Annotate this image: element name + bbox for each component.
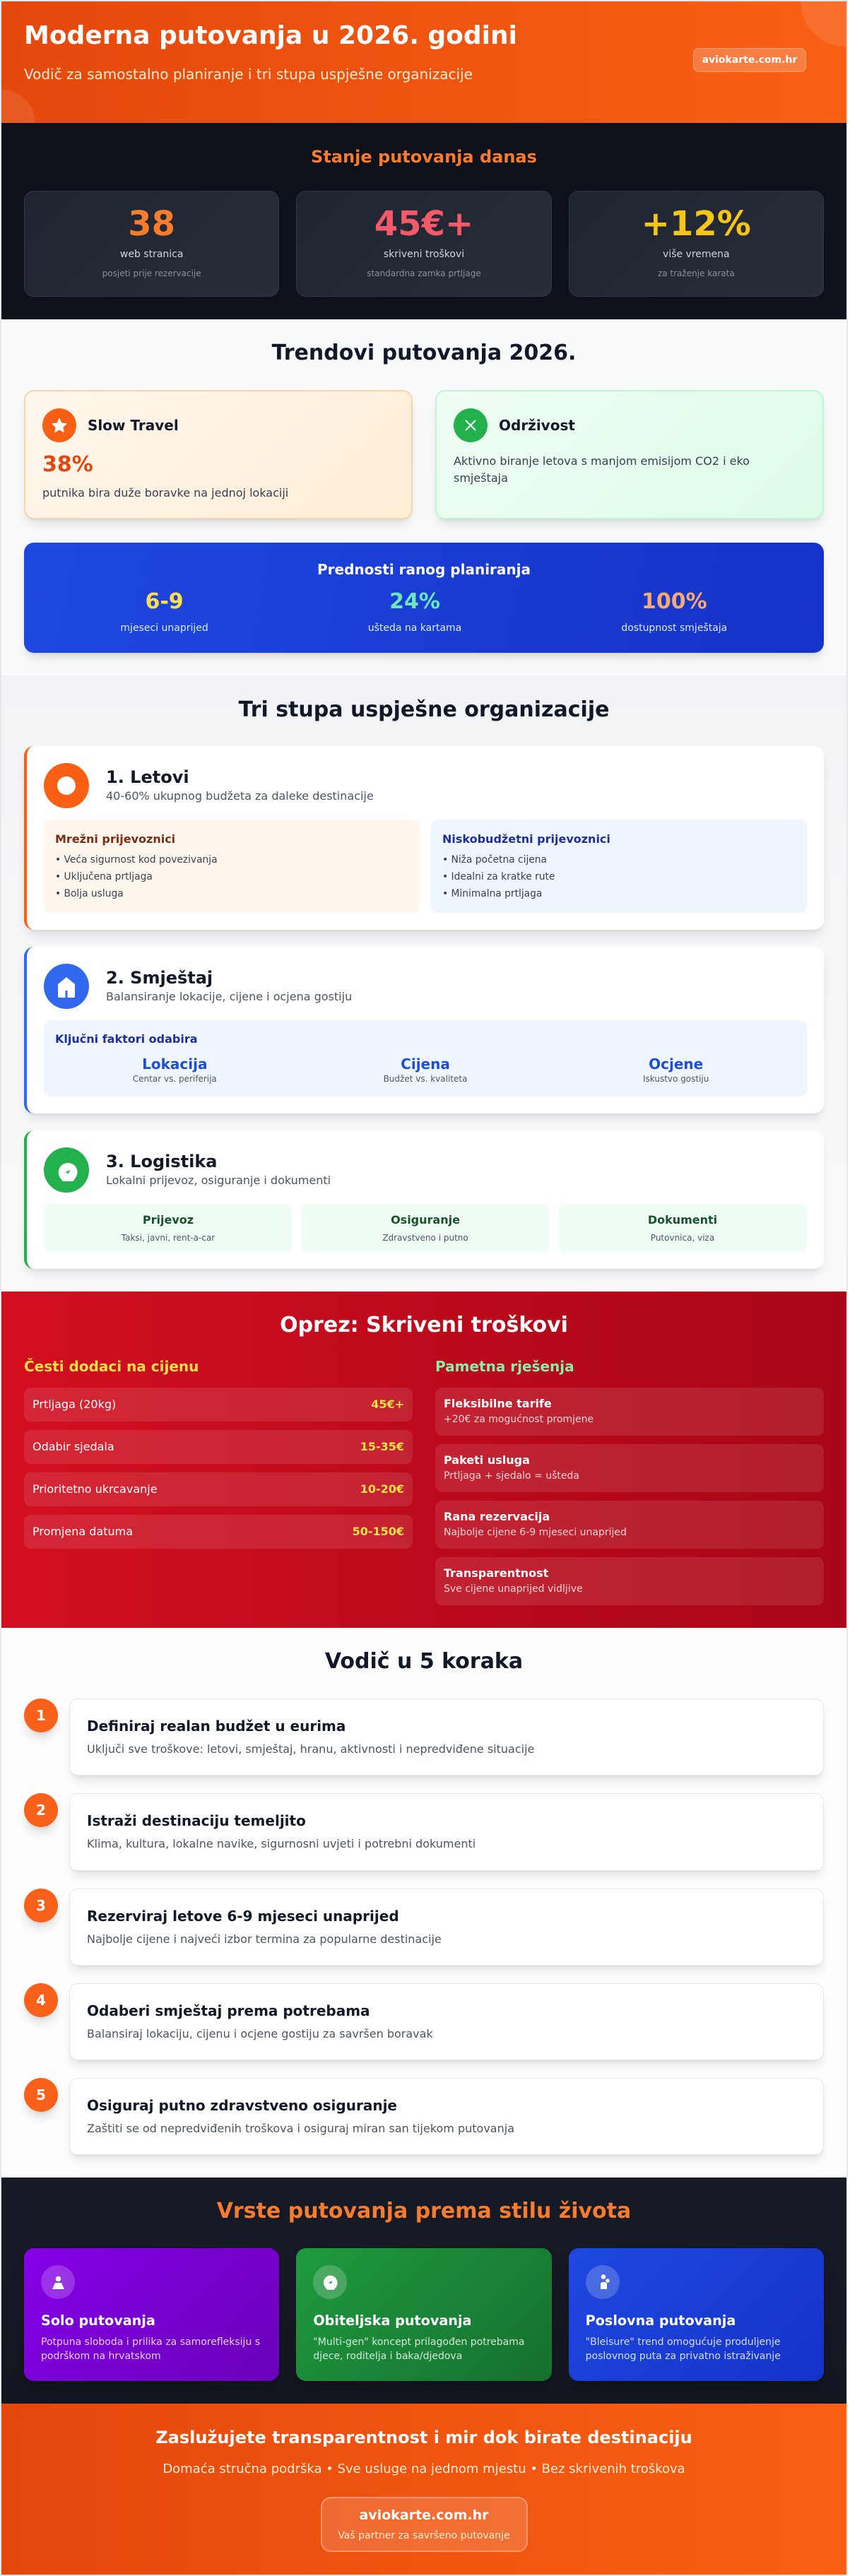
heading: Tri stupa uspješne organizacije	[239, 697, 609, 722]
box: key factors: Cijena	[401, 1056, 450, 1073]
stat card: hidden costs: 45€+	[374, 204, 473, 244]
pillar title: 1. Letovi	[106, 767, 189, 787]
title: Moderna putovanja u 2026. godini	[24, 21, 517, 50]
step 2 card: Istraži destinaciju temeljito	[87, 1812, 306, 1829]
solution: packages	[435, 1444, 824, 1492]
step 3 number	[24, 1888, 58, 1922]
step 1 card: Definiraj realan budžet u eurima	[87, 1718, 346, 1735]
stat card: web pages: 38	[128, 204, 175, 244]
card: solo	[24, 2248, 279, 2381]
icon: star	[42, 408, 76, 442]
step 2 number	[24, 1793, 58, 1827]
box: insurance: Zdravstveno i putno	[382, 1233, 468, 1243]
step 5 card	[69, 2078, 824, 2155]
subtitle: Vodič za samostalno planiranje i tri stupa uspješne organizacije	[24, 65, 473, 82]
box: network carriers	[44, 820, 420, 913]
card: business	[569, 2248, 824, 2381]
icon: cross	[454, 408, 488, 442]
stat card: web pages: posjeti prije rezervacije	[102, 268, 201, 278]
card: sustainability	[435, 390, 824, 519]
solution: early booking: Rana rezervacija	[444, 1510, 550, 1523]
badge: brand: aviokarte.com.hr	[702, 54, 797, 66]
card text: podrškom na hrvatskom	[41, 2351, 161, 2362]
step 1 number	[24, 1698, 58, 1732]
pillar subtitle: Lokalni prijevoz, osiguranje i dokumenti	[106, 1174, 331, 1187]
stat card: more time: za traženje karata	[658, 268, 735, 278]
box: documents: Dokumenti	[648, 1213, 717, 1227]
solution: early booking: Najbolje cijene 6-9 mjeseci unaprijed	[444, 1527, 627, 1538]
heading: Vodič u 5 koraka	[325, 1649, 523, 1674]
description: smještaja	[454, 471, 508, 485]
card title: Solo putovanja	[41, 2312, 155, 2329]
step 2 card: Klima, kultura, lokalne navike, sigurnosni uvjeti i potrebni dokumenti	[87, 1837, 476, 1850]
brand box	[321, 2497, 527, 2552]
box: key factors: Lokacija	[142, 1056, 207, 1073]
stat card: hidden costs: skriveni troškovi	[384, 249, 464, 260]
box: network carriers: • Uključena prtljaga	[55, 871, 153, 882]
card title: Obiteljska putovanja	[313, 2312, 472, 2329]
heading: Stanje putovanja danas	[311, 147, 537, 167]
box: key factors: Budžet vs. kvaliteta	[384, 1074, 467, 1084]
step 3 card: Rezerviraj letove 6-9 mjeseci unaprijed	[87, 1908, 399, 1925]
description: putnika bira duže boravke na jednoj lokaciji	[42, 486, 288, 499]
step 4 card: Balansiraj lokaciju, cijenu i ocjene gostiju za savršen boravak	[87, 2027, 433, 2040]
pillar: logistics	[24, 1130, 824, 1269]
badge: brand	[693, 48, 806, 72]
card text: Potpuna sloboda i prilika za samorefleksiju s	[41, 2336, 260, 2348]
cost row: baggage: Prtljaga (20kg)	[33, 1398, 116, 1411]
step 1 card	[69, 1698, 824, 1776]
pillar: flights	[24, 746, 824, 930]
step 1 number: 1	[36, 1707, 46, 1724]
card: slow travel	[24, 390, 413, 519]
pillar subtitle: Balansiranje lokacije, cijene i ocjena gostiju	[106, 990, 352, 1003]
solution: flexible fares	[435, 1388, 824, 1436]
box: network carriers: • Bolja usluga	[55, 888, 124, 899]
card text: "Multi-gen" koncept prilagođen potrebama	[313, 2336, 524, 2348]
icon: badge check	[44, 1147, 89, 1193]
cost row: priority boarding: 10-20€	[360, 1482, 404, 1496]
stat card: more time: više vremena	[663, 249, 730, 260]
box: transport: Prijevoz	[143, 1213, 194, 1227]
icon: badge	[313, 2265, 347, 2299]
box: key factors: Ocjene	[649, 1056, 703, 1073]
cost row: baggage: 45€+	[371, 1398, 404, 1411]
section: state of travel today	[1, 123, 846, 319]
column heading: common add-ons: Česti dodaci na cijenu	[24, 1358, 199, 1375]
step 4 number	[24, 1983, 58, 2017]
stat card: more time: +12%	[642, 204, 751, 244]
card title: Slow Travel	[88, 417, 179, 434]
stat card: more time	[569, 191, 824, 297]
brand name: aviokarte.com.hr	[359, 2507, 489, 2523]
cost row: seat: 15-35€	[360, 1440, 404, 1453]
card text: poslovnog puta za privatno istraživanje	[586, 2351, 781, 2362]
section: hidden costs	[1, 1292, 846, 1628]
box: documents: Putovnica, viza	[651, 1233, 714, 1243]
stat card: web pages: web stranica	[120, 249, 183, 260]
cost row: seat	[24, 1430, 413, 1464]
box: key factors: Iskustvo gostiju	[643, 1074, 709, 1084]
box: documents	[558, 1204, 807, 1252]
stat card: hidden costs	[296, 191, 552, 297]
section: travel types	[1, 2178, 846, 2404]
box: key factors: Centar vs. periferija	[133, 1074, 217, 1084]
cost row: date change: Promjena datuma	[33, 1525, 133, 1538]
solution: transparency	[435, 1557, 824, 1605]
step 4 card	[69, 1983, 824, 2060]
card text	[586, 2336, 781, 2362]
box: low-cost carriers: • Idealni za kratke rute	[442, 871, 555, 882]
card text	[41, 2336, 260, 2362]
metric: availability: 100%	[642, 589, 707, 614]
step 3 number: 3	[36, 1896, 46, 1913]
solution: transparency: Transparentnost	[444, 1566, 548, 1580]
heading: Trendovi putovanja 2026.	[272, 341, 576, 365]
panel: early planning benefits	[24, 543, 824, 653]
cost row: date change	[24, 1515, 413, 1549]
step 2 number: 2	[36, 1802, 46, 1819]
section: header	[1, 1, 846, 123]
card: family	[296, 2248, 552, 2381]
card text	[313, 2336, 524, 2362]
box: network carriers: • Veća sigurnost kod povezivanja	[55, 854, 218, 865]
card title: Poslovna putovanja	[586, 2312, 736, 2329]
stat card: hidden costs: standardna zamka prtljage	[367, 268, 481, 278]
metric: savings: 24%	[389, 589, 440, 614]
solution: packages: Prtljaga + sjedalo = ušteda	[444, 1470, 579, 1482]
solution: early booking	[435, 1501, 824, 1549]
step 3 card	[69, 1888, 824, 1966]
column heading: smart solutions: Pametna rješenja	[435, 1358, 574, 1375]
brand tagline: Vaš partner za savršeno putovanje	[338, 2530, 510, 2541]
metric label: dostupnost smještaja	[621, 622, 727, 634]
headline: Zaslužujete transparentnost i mir dok birate destinaciju	[155, 2428, 692, 2447]
cost row: baggage	[24, 1388, 413, 1422]
step 4 number: 4	[36, 1992, 46, 2009]
box: low-cost carriers	[431, 820, 807, 913]
pillar subtitle: 40-60% ukupnog budžeta za daleke destinacije	[106, 789, 374, 803]
step 5 card: Osiguraj putno zdravstveno osiguranje	[87, 2097, 397, 2114]
box: insurance	[301, 1204, 550, 1252]
section: five step guide	[1, 1628, 846, 2178]
stat: 38%: 38%	[42, 452, 93, 476]
icon: house	[44, 964, 89, 1009]
cost row: date change: 50-150€	[353, 1525, 404, 1538]
metric label: ušteda na kartama	[368, 622, 461, 634]
box: transport	[44, 1204, 293, 1252]
benefits line: Domaća stručna podrška • Sve usluge na jednom mjestu • Bez skrivenih troškova	[163, 2462, 685, 2476]
cost row: priority boarding	[24, 1472, 413, 1506]
box: insurance: Osiguranje	[391, 1213, 460, 1227]
box: low-cost carriers: • Minimalna prtljaga	[442, 888, 542, 899]
box: key factors: Ključni faktori odabira	[55, 1032, 198, 1046]
section: trends 2026	[1, 319, 846, 675]
panel heading: Prednosti ranog planiranja	[317, 561, 531, 578]
solution: packages: Paketi usluga	[444, 1453, 530, 1467]
box: transport: Taksi, javni, rent-a-car	[122, 1233, 215, 1243]
metric label: mjeseci unaprijed	[120, 622, 208, 634]
pillar title: 3. Logistika	[106, 1152, 218, 1171]
pillar title: 2. Smještaj	[106, 968, 213, 988]
icon: people	[586, 2265, 620, 2299]
solution: flexible fares: Fleksibilne tarife	[444, 1397, 552, 1410]
step 1 card: Uključi sve troškove: letovi, smještaj, hranu, aktivnosti i nepredviđene situacije	[87, 1742, 534, 1756]
step 4 card: Odaberi smještaj prema potrebama	[87, 2002, 370, 2019]
step 3 card: Najbolje cijene i najveći izbor termina za popularne destinacije	[87, 1932, 442, 1946]
card title: Održivost	[499, 417, 575, 434]
section: footer call to action	[1, 2404, 846, 2575]
heading: Oprez: Skriveni troškovi	[280, 1313, 568, 1337]
cost row: priority boarding: Prioritetno ukrcavanje	[33, 1482, 158, 1496]
card text: djece, roditelja i baka/djedova	[313, 2351, 462, 2362]
card text: "Bleisure" trend omogućuje produljenje	[586, 2336, 780, 2348]
solution: transparency: Sve cijene unaprijed vidljive	[444, 1583, 583, 1595]
step 5 number	[24, 2078, 58, 2112]
stat card: web pages	[24, 191, 279, 297]
icon: ring	[44, 763, 89, 808]
step 2 card	[69, 1793, 824, 1871]
box: key factors	[44, 1020, 807, 1097]
metric: months: 6-9	[145, 589, 184, 614]
step 5 number: 5	[36, 2086, 46, 2103]
box: network carriers: Mrežni prijevoznici	[55, 832, 175, 846]
cost row: seat: Odabir sjedala	[33, 1440, 114, 1453]
box: low-cost carriers: Niskobudžetni prijevoznici	[442, 832, 610, 846]
description: Aktivno biranje letova s manjom emisijom CO2 i eko	[454, 454, 750, 468]
description	[454, 454, 750, 485]
icon: person	[41, 2265, 75, 2299]
solution: flexible fares: +20€ za mogućnost promjene	[444, 1414, 594, 1425]
section: three pillars	[1, 675, 846, 1292]
box: low-cost carriers: • Niža početna cijena	[442, 854, 547, 865]
heading: Vrste putovanja prema stilu života	[217, 2199, 631, 2223]
step 5 card: Zaštiti se od nepredviđenih troškova i osiguraj miran san tijekom putovanja	[87, 2122, 514, 2135]
pillar: accommodation	[24, 947, 824, 1113]
